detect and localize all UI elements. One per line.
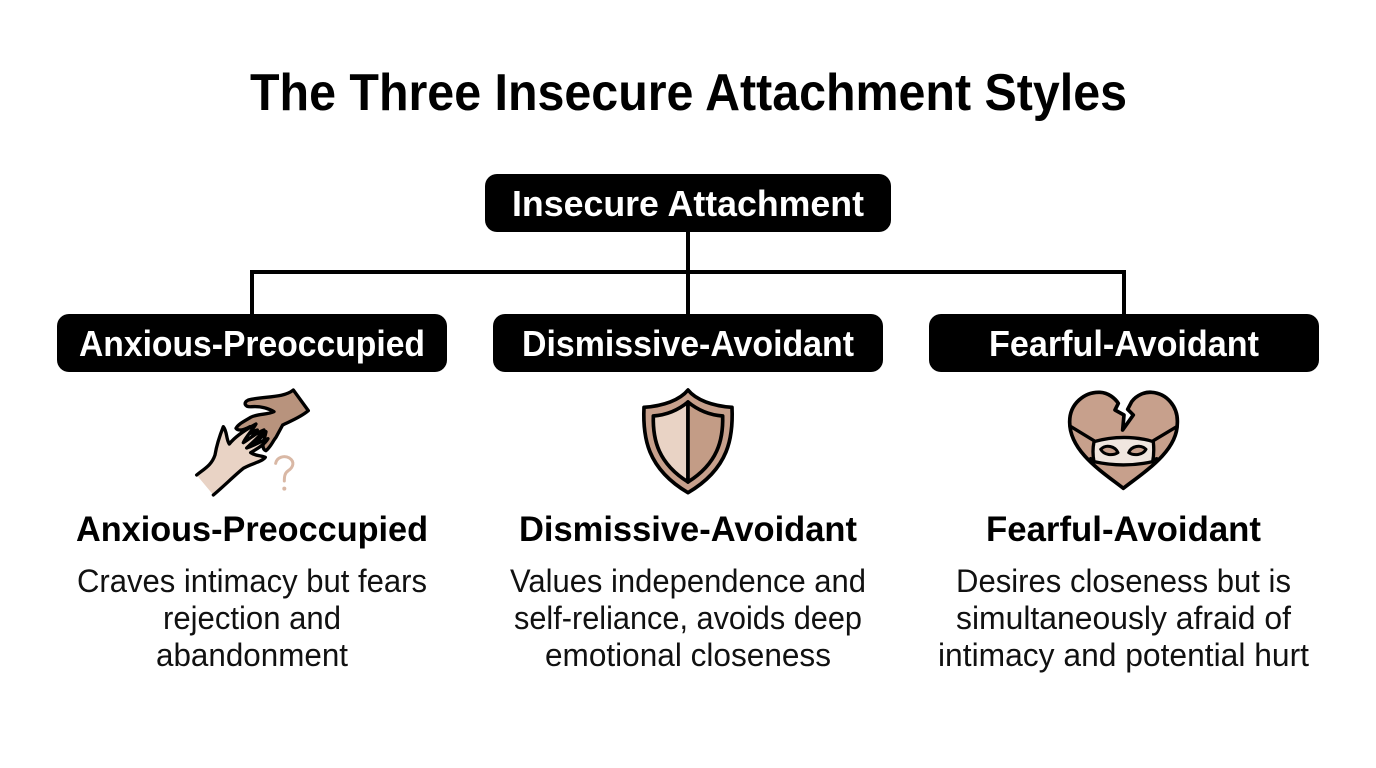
column: Fearful-Avoidant text — [938, 510, 1309, 673]
heading: Anxious-Preoccupied — [76, 510, 428, 549]
column: Dismissive-Avoidant text — [510, 510, 866, 673]
node: Dismissive-Avoidant — [493, 314, 883, 372]
connector lines — [252, 232, 1124, 314]
description: Craves intimacy but fears — [77, 563, 427, 599]
description — [77, 563, 427, 673]
description: rejection and — [163, 600, 341, 636]
column: Anxious-Preoccupied text — [76, 510, 428, 673]
description — [510, 563, 866, 673]
node: Dismissive-Avoidant: Dismissive-Avoidant — [522, 323, 854, 364]
icon: reaching hands with question mark — [197, 390, 308, 495]
description: self-reliance, avoids deep — [514, 600, 862, 636]
node: Fearful-Avoidant: Fearful-Avoidant — [989, 323, 1259, 364]
description: Values independence and — [510, 563, 866, 599]
node: Anxious-Preoccupied — [57, 314, 447, 372]
title: The Three Insecure Attachment Styles — [250, 64, 1127, 122]
question mark — [276, 457, 293, 481]
description: emotional closeness — [545, 637, 831, 673]
heading: Dismissive-Avoidant — [519, 510, 857, 549]
description: abandonment — [156, 637, 348, 673]
icon: broken heart with mask — [1070, 392, 1177, 488]
node: Anxious-Preoccupied: Anxious-Preoccupied — [79, 323, 425, 364]
dark hand — [236, 390, 308, 451]
icon: shield — [644, 390, 732, 493]
description: intimacy and potential hurt — [938, 637, 1309, 673]
light hand — [197, 424, 268, 495]
node: Fearful-Avoidant — [929, 314, 1319, 372]
root node: Insecure Attachment — [485, 174, 891, 232]
description — [938, 563, 1309, 673]
root node: Insecure Attachment: Insecure Attachment — [512, 183, 864, 224]
description: Desires closeness but is — [956, 563, 1291, 599]
description: simultaneously afraid of — [956, 600, 1291, 636]
heading: Fearful-Avoidant — [986, 510, 1261, 549]
